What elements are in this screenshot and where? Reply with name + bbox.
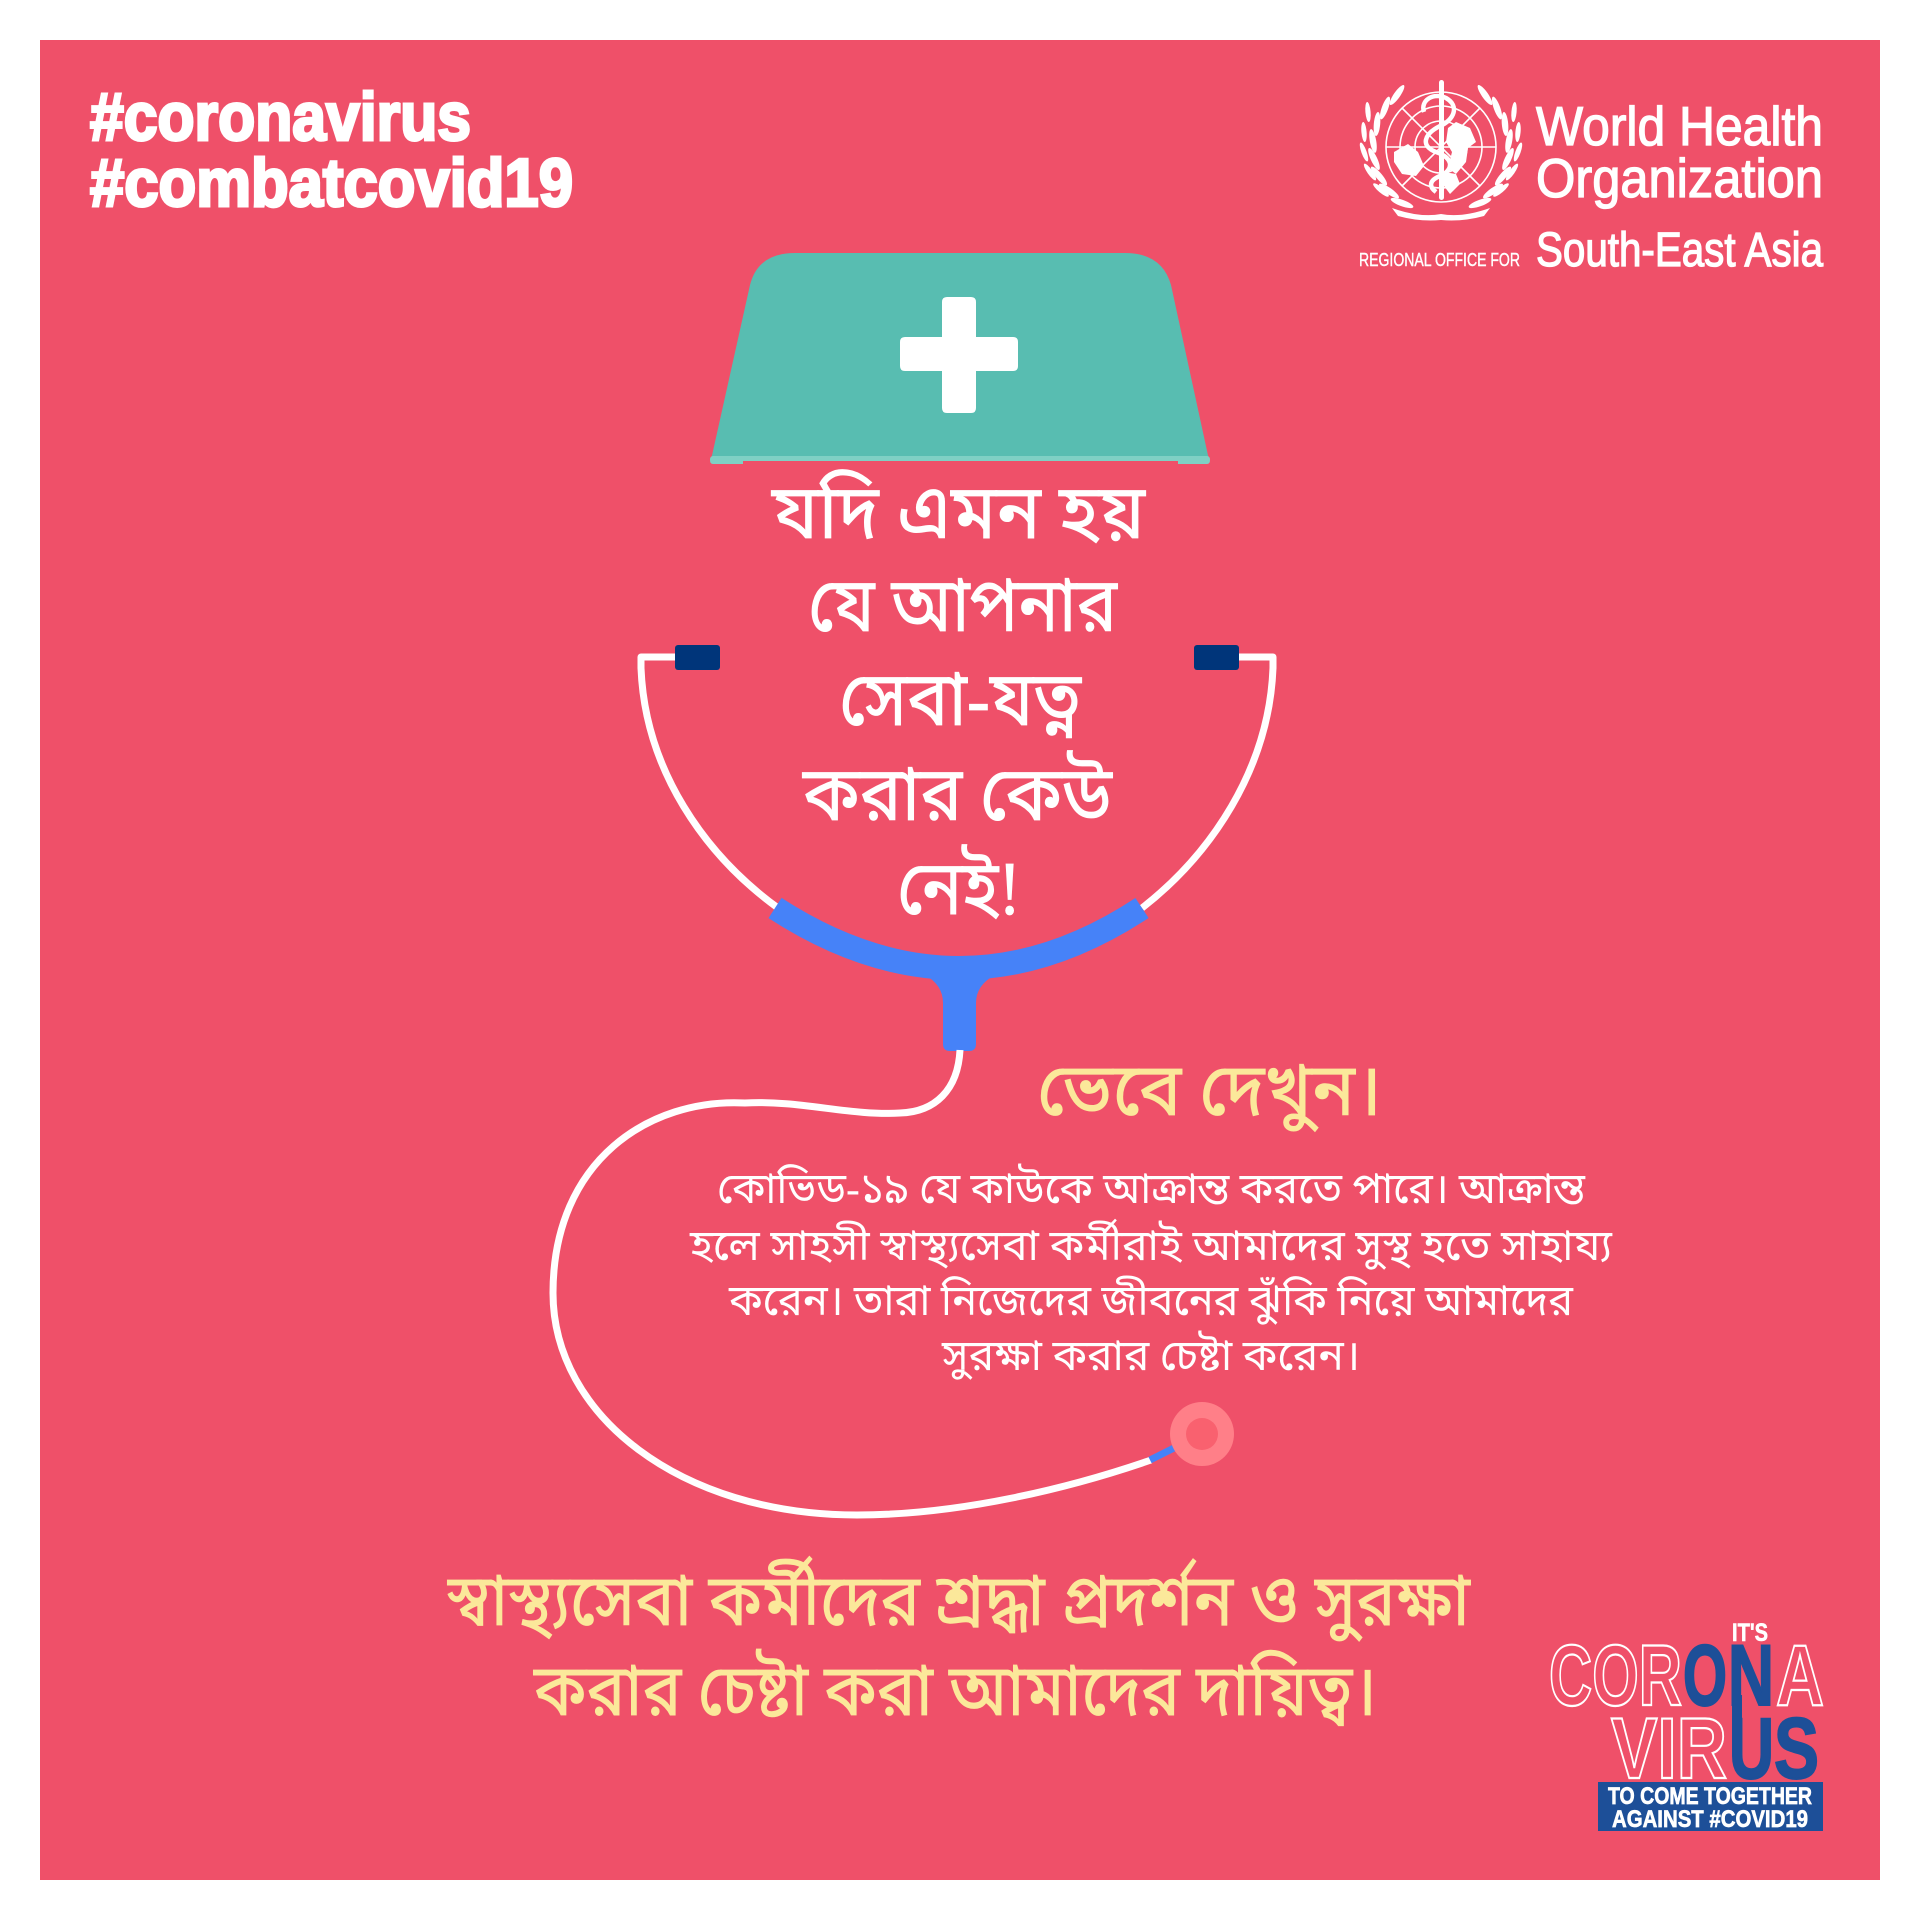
badge: it's coronavirus: COR [1549,1628,1682,1724]
badge: it's coronavirus: A [1776,1628,1824,1724]
hashtags heading [90,79,573,221]
title text [771,470,1146,931]
badge: it's coronavirus: TO COME TOGETHER [1608,1783,1812,1810]
blue stem [925,975,995,1051]
body paragraph: কোভিড-১৯ যে কাউকে আক্রান্ত করতে পারে। আক্রান্ত [717,1163,1585,1213]
title text: যদি এমন হয় [771,470,1146,555]
body paragraph [689,1163,1613,1380]
closing message [447,1555,1471,1731]
badge: it's coronavirus: AGAINST #COVID19 [1612,1806,1808,1833]
badge: it's coronavirus [1549,1619,1824,1833]
closing message: করার চেষ্টা করা আমাদের দায়িত্ব। [533,1649,1377,1731]
subheading: ভেবে দেখুন। [1037,1050,1382,1132]
badge: it's coronavirus: S [1774,1701,1819,1797]
badge: it's coronavirus: VIR [1611,1701,1727,1797]
WHO wordmark: REGIONAL OFFICE FOR [1359,250,1520,270]
hashtags heading: #coronavirus [90,79,471,155]
badge: it's coronavirus: U [1729,1701,1774,1797]
WHO wordmark: World Health [1536,95,1823,157]
hashtags heading: #combatcovid19 [90,145,573,221]
badge: it's coronavirus: IT'S [1732,1619,1768,1647]
closing message: স্বাস্থ্যসেবা কর্মীদের শ্রদ্ধা প্রদর্শন ও সুরক্ষা [447,1555,1471,1642]
icon: nurse cap [710,253,1210,464]
body paragraph: করেন। তারা নিজেদের জীবনের ঝুঁকি নিয়ে আমাদের [728,1275,1574,1325]
left ear tip [675,645,720,670]
chest piece [1170,1402,1234,1466]
icon: stethoscope [553,645,1273,1515]
body paragraph: হলে সাহসী স্বাস্থ্যসেবা কর্মীরাই আমাদের সুস্থ হতে সাহায্য [689,1218,1613,1270]
WHO logo [1358,80,1823,277]
WHO wordmark: Organization [1536,147,1823,209]
left ear tube [641,657,778,908]
badge: it's coronavirus: O [1683,1628,1727,1724]
blue headset yoke [775,908,1142,968]
body paragraph: সুরক্ষা করার চেষ্টা করেন। [941,1331,1360,1380]
icon: WHO emblem [1358,80,1524,220]
title text: যে আপনার [808,564,1119,648]
title text: সেবা-যত্ন [839,658,1083,742]
badge: it's coronavirus: N [1728,1628,1774,1724]
title text: করার কেউ [802,751,1113,837]
long white tube [553,1050,1151,1515]
title text: নেই! [897,845,1021,931]
WHO wordmark: South-East Asia [1536,224,1823,277]
WHO wordmark [1359,95,1823,277]
blue connector [1150,1447,1176,1460]
right ear tip [1194,645,1239,670]
icon: white cross [900,297,1018,413]
right ear tube [1142,657,1273,908]
